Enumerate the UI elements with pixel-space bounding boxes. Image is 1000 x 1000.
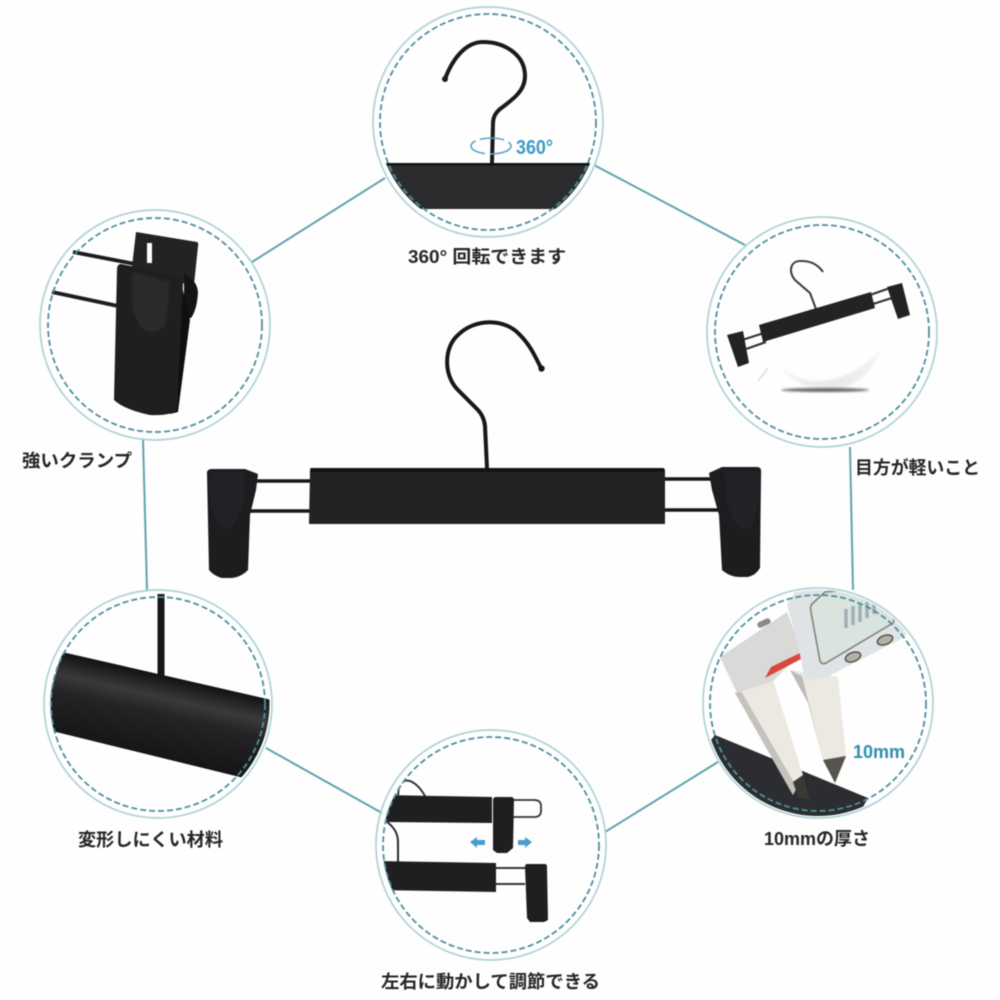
connector lines between circles: [143, 165, 853, 832]
hook closeup: [445, 42, 525, 163]
top rod loop: [510, 800, 541, 817]
main silver body: [787, 590, 906, 680]
stem: [158, 594, 164, 678]
bottom hanger hook: [387, 822, 398, 862]
jaw tips: [823, 756, 846, 783]
label: 360° 回転できます: [408, 247, 566, 267]
bar closeup: [50, 652, 270, 778]
display: [809, 590, 896, 665]
label: 強いクランプ: [22, 451, 132, 471]
side wall: [170, 278, 190, 414]
rods: [742, 288, 892, 349]
red scale: [765, 653, 801, 678]
panel: 10mm thickness: [695, 585, 940, 849]
right clip: [709, 467, 761, 577]
bottom bar: [375, 861, 496, 892]
top hanger hook: [398, 781, 427, 800]
feather: [758, 347, 882, 392]
right jaw: [792, 670, 846, 760]
panel: durable material: [40, 590, 285, 850]
label: 10mmの厚さ: [764, 829, 870, 849]
hook: [791, 261, 823, 309]
360 degree callout: 360°: [516, 137, 553, 159]
arrow left: [470, 837, 485, 848]
arrow right: [518, 837, 532, 848]
left jaw: [735, 680, 803, 795]
panel: strong clamp: [22, 210, 270, 471]
adjustable hangers: [375, 781, 548, 922]
label: 左右に動かして調節できる: [381, 971, 600, 992]
10mm callout: 10mm: [853, 742, 905, 762]
concave thumb rest: [132, 272, 170, 332]
back plate: [131, 232, 198, 285]
bottom clip: [525, 864, 548, 922]
rods: [52, 252, 135, 306]
label: 変形しにくい材料: [78, 830, 223, 850]
clips: [727, 331, 749, 367]
bar: [759, 292, 875, 342]
bar: [309, 468, 665, 524]
top clip: [493, 797, 514, 853]
black bar section: [385, 162, 591, 210]
hook: [447, 322, 541, 468]
buttons: [844, 650, 862, 664]
clip body: [114, 264, 183, 415]
label: 目方が軽いこと: [855, 457, 980, 478]
panel: 360 rotation: [370, 7, 610, 267]
slider plate: [720, 612, 802, 693]
left clip: [207, 469, 258, 578]
black hanger bar: [710, 734, 868, 817]
panel: slide adjust: [375, 730, 606, 992]
caliper: [710, 590, 906, 817]
central pants hanger: [207, 322, 761, 578]
rods: [245, 479, 722, 511]
top bar: [380, 795, 492, 823]
bottom rods: [496, 868, 525, 884]
rotation arrow: [471, 138, 511, 154]
panel: lightweight: [707, 217, 980, 478]
spring: [184, 274, 198, 318]
display digits: [846, 600, 874, 628]
